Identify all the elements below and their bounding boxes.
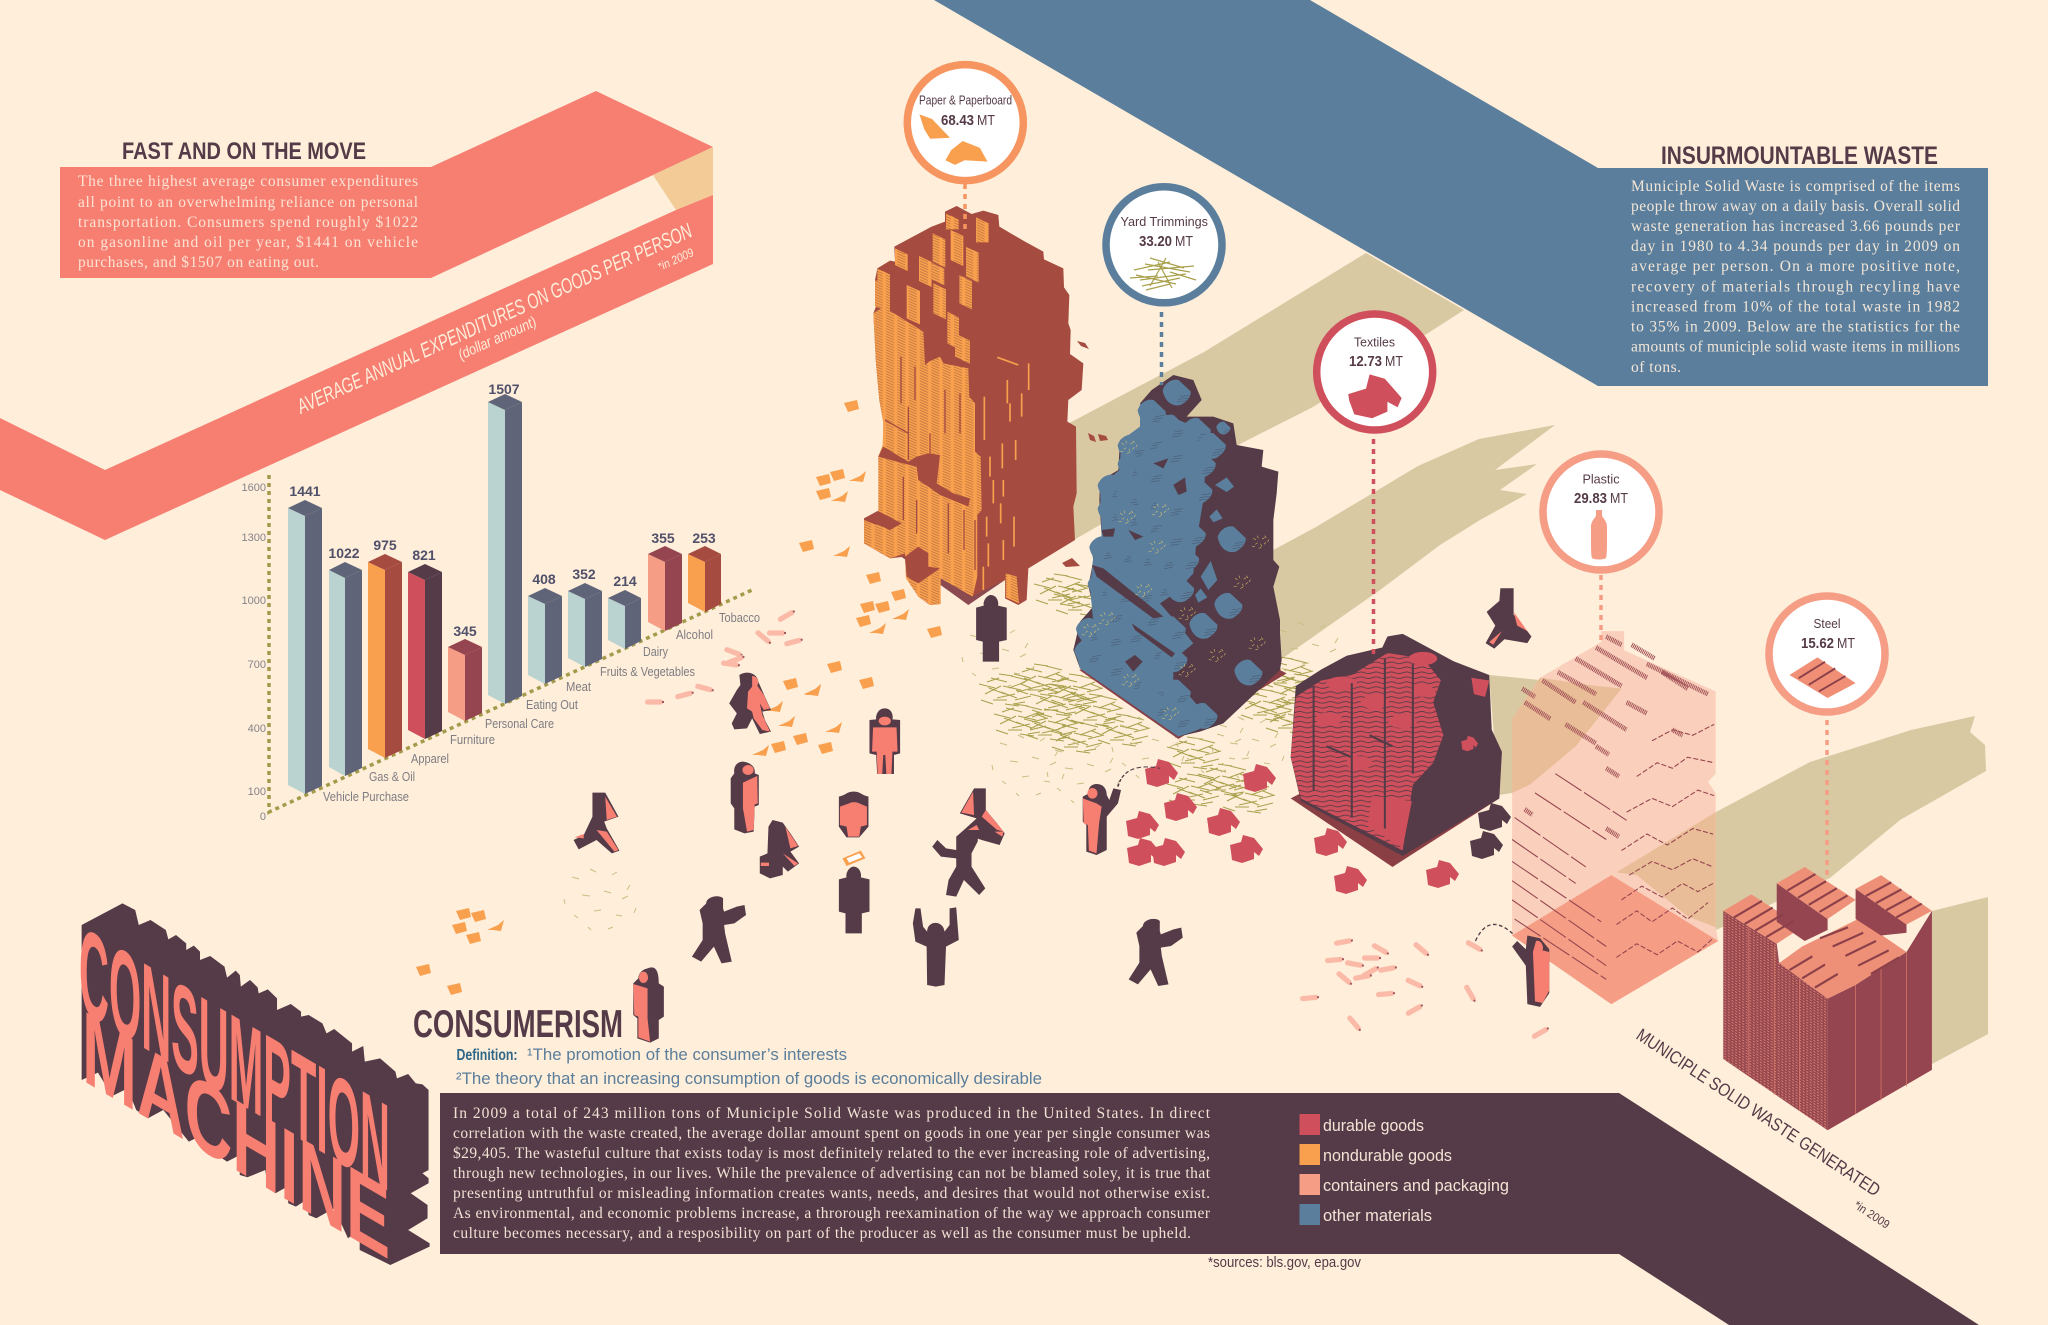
bar values: 345 xyxy=(453,623,477,639)
person: tumbling xyxy=(760,820,799,878)
text block: fast and on the move: purchases, and $1507 on eating out. xyxy=(78,254,319,271)
legend xyxy=(1300,1114,1509,1225)
icon: steel sheet xyxy=(1789,657,1856,698)
text block: fast and on the move: on gasonline and oil per year, $1441 on vehicle xyxy=(78,234,418,251)
bar values: 352 xyxy=(572,566,596,582)
y axis labels: 100 xyxy=(248,786,266,798)
textile highlights and gaps xyxy=(1316,652,1489,848)
bar values: 253 xyxy=(692,530,716,546)
person: seen from above xyxy=(839,792,868,837)
text block: insurmountable waste: people throw away on a daily basis. Overall solid xyxy=(1631,198,1960,215)
definition: Definition: xyxy=(456,1047,518,1064)
person: beside consumerism heading xyxy=(633,967,664,1043)
grass scatter around yard pile xyxy=(564,574,1344,930)
waste callouts xyxy=(907,65,1885,880)
text block: consumerism: through new technologies, in our lives. While the prevalence of advertising can not be blamed soley, it is true that xyxy=(453,1165,1211,1182)
pile silhouette xyxy=(1291,634,1502,856)
ribbon: consumerism panel xyxy=(440,1093,1979,1325)
callout: steel: MT xyxy=(1837,635,1855,652)
bar category labels: Meat xyxy=(566,680,591,694)
pile silhouette xyxy=(864,206,1083,605)
text block: insurmountable waste: Municiple Solid Waste is comprised of the items xyxy=(1631,178,1960,195)
callout: paper and paperboard: 68.43 xyxy=(941,112,974,129)
ribbon: fast and on the move / chart banner xyxy=(0,91,713,540)
callout: paper and paperboard: MT xyxy=(977,112,995,129)
person: side view with pink body xyxy=(731,762,759,833)
pile base xyxy=(1291,746,1499,867)
steel top plates xyxy=(1723,867,1932,999)
y axis labels: 0 xyxy=(260,811,266,823)
shadow seen through block xyxy=(1512,678,1716,927)
bar: alcohol xyxy=(648,546,682,631)
y axis labels: 1600 xyxy=(242,482,266,494)
heading: fast and on the move: FAST AND ON THE MOVE xyxy=(122,138,366,165)
bar: furniture xyxy=(408,564,442,739)
chart axes xyxy=(269,475,752,812)
text block: fast and on the move: all point to an overwhelming reliance on personal xyxy=(78,194,418,211)
brown shadow cuts on paper xyxy=(864,333,970,583)
ribbon: insurmountable waste panel xyxy=(934,0,1988,386)
text block: consumerism: culture becomes necessary, and a resposibility on part of the producer as well as the consumer must be upheld. xyxy=(453,1225,1191,1242)
bar category labels: Furniture xyxy=(450,733,495,747)
rotated label: municiple solid waste generated: MUNICIPLE SOLID WASTE GENERATED xyxy=(1633,1025,1884,1200)
pile: steel xyxy=(1723,867,1932,1130)
icon: bottle xyxy=(1591,510,1607,560)
bar values: 821 xyxy=(412,547,436,563)
bar category labels: Eating Out xyxy=(526,698,578,712)
icon: paper sheets xyxy=(919,114,988,165)
title: consumption machine xyxy=(79,900,430,1282)
callout: paper and paperboard xyxy=(907,65,1023,232)
text block: insurmountable waste: average per person. On a more positive note, xyxy=(1631,258,1960,275)
definition: ¹The promotion of the consumer’s interests xyxy=(527,1045,847,1064)
text block: fast and on the move xyxy=(78,173,418,271)
callout: yard trimmings xyxy=(1106,187,1222,385)
sources note: *sources: bls.gov, epa.gov xyxy=(1208,1255,1362,1271)
bar values: 975 xyxy=(373,537,397,553)
block right face xyxy=(1828,911,1932,1130)
text block: consumerism: $29,405. The wasteful culture that exists today is most definitely related to the ever increasing role of advertising, xyxy=(453,1145,1210,1162)
bar category labels xyxy=(323,611,760,804)
callout: plastic: Plastic xyxy=(1582,472,1620,486)
steel column lines xyxy=(1749,927,1906,1114)
bar: vehicle purchase xyxy=(288,500,322,794)
bar: tobacco xyxy=(688,546,721,612)
bar category labels: Dairy xyxy=(643,645,669,659)
callout: textiles: MT xyxy=(1385,353,1403,370)
title extrusion xyxy=(82,903,430,1265)
callout: steel: 15.62 xyxy=(1801,635,1834,652)
callout: yard trimmings: MT xyxy=(1175,233,1193,250)
translucent block xyxy=(1512,631,1718,1004)
text block: fast and on the move: The three highest average consumer expenditures xyxy=(78,173,418,190)
back sides of raised plates xyxy=(1777,883,1828,941)
bar values: 408 xyxy=(532,571,556,587)
dark gaps between bags xyxy=(1092,458,1187,672)
text block: insurmountable waste: of tons. xyxy=(1631,359,1681,376)
person: throwing shirt xyxy=(1083,784,1121,855)
legend: durable goods xyxy=(1323,1116,1424,1135)
bar category labels: Fruits & Vegetables xyxy=(600,665,695,679)
person: falling left xyxy=(574,793,619,853)
person: flying figure xyxy=(1486,588,1531,649)
throw arc xyxy=(1118,767,1160,787)
bottle rows on top xyxy=(1522,637,1708,837)
bar category labels: Personal Care xyxy=(485,717,554,731)
person: dancing dark figure xyxy=(932,830,985,897)
definition: ²The theory that an increasing consumption of goods is economically desirable xyxy=(456,1069,1042,1088)
callout: yard trimmings: Yard Trimmings xyxy=(1120,215,1208,229)
heading: insurmountable waste: INSURMOUNTABLE WASTE xyxy=(1661,142,1938,170)
person: running with paper xyxy=(729,673,771,734)
rotated label: municiple solid waste generated: *in 2009 xyxy=(1851,1198,1893,1232)
bar category labels: Tobacco xyxy=(719,611,760,625)
icon: grass xyxy=(1130,258,1196,290)
callout: plastic xyxy=(1543,454,1659,640)
scattered shirts xyxy=(1126,759,1511,894)
scattered bottles xyxy=(645,609,1550,1040)
person: walking dark right xyxy=(1129,919,1183,986)
pile: paper and paperboard xyxy=(864,206,1083,605)
text block: insurmountable waste: day in 1980 to 4.34 pounds per day in 2009 on xyxy=(1631,238,1960,255)
paper blocks at top xyxy=(875,213,1019,603)
text block: insurmountable waste: amounts of municiple solid waste items in millions xyxy=(1631,338,1960,356)
heading: consumerism: CONSUMERISM xyxy=(413,1003,623,1046)
person: standing under paper pile xyxy=(976,595,1007,662)
person: carried on shoulders xyxy=(960,788,1005,845)
person: throwing bottle xyxy=(1512,936,1549,1007)
callout: textiles xyxy=(1317,314,1433,658)
text block: consumerism: As environmental, and economic problems increase, a throrough reexamination of the way we approach consumer xyxy=(453,1205,1211,1222)
text block: insurmountable waste: recovery of materials through recyling have xyxy=(1631,278,1960,296)
legend: other materials xyxy=(1323,1206,1432,1225)
chart title on ribbon: (dollar amount) xyxy=(456,313,539,364)
bar: fruits and vegetables xyxy=(568,583,602,667)
bar: eating out xyxy=(488,394,522,704)
text block: consumerism xyxy=(453,1105,1211,1242)
callout: textiles: Textiles xyxy=(1354,336,1395,350)
bar category labels: Alcohol xyxy=(676,628,713,642)
paper front mass xyxy=(864,307,982,605)
pile: yard trimmings xyxy=(1073,375,1287,739)
y axis labels xyxy=(242,482,266,823)
bar values: 1441 xyxy=(289,483,321,499)
bar chart: average annual expenditures xyxy=(242,381,760,823)
bar values: 1022 xyxy=(328,545,360,561)
people crowd xyxy=(574,595,1183,1043)
text block: insurmountable waste: to 35% in 2009. Below are the statistics for the xyxy=(1631,318,1960,336)
cast shadows of the waste piles xyxy=(1060,253,1988,1064)
text block: consumerism: correlation with the waste created, the average dollar amount spent on goods in one year per single consumer was xyxy=(453,1125,1210,1142)
text block: consumerism: In 2009 a total of 243 million tons of Municiple Solid Waste was produced in the United States. In direct xyxy=(453,1105,1211,1122)
base xyxy=(1512,875,1718,1004)
text block: consumerism: presenting untruthful or misleading information creates wants, needs, and desires that would not otherwise exist. xyxy=(453,1185,1210,1202)
legend: nondurable goods xyxy=(1323,1146,1452,1165)
bar: apparel xyxy=(368,554,402,758)
paper slivers on shaded side xyxy=(983,357,1029,590)
bar values: 1507 xyxy=(488,381,520,397)
pile silhouette xyxy=(1073,375,1282,737)
pile base xyxy=(897,550,1005,605)
pile: textiles xyxy=(1291,634,1502,867)
bar values xyxy=(289,381,716,639)
flying box of goods xyxy=(842,851,865,866)
person: facing front with pink body xyxy=(869,708,900,774)
block left face xyxy=(1723,911,1828,1130)
callout: steel xyxy=(1769,596,1885,880)
blue mass xyxy=(1075,403,1213,737)
bar category labels: Gas & Oil xyxy=(369,770,415,784)
throw arc xyxy=(1475,924,1515,941)
text block: insurmountable waste: increased from 10% of the total waste in 1982 xyxy=(1631,298,1960,316)
text block: fast and on the move: transportation. Consumers spend roughly $1022 xyxy=(78,214,418,231)
text block: insurmountable waste: waste generation has increased 3.66 pounds per xyxy=(1631,218,1961,235)
scattered paper pieces xyxy=(416,341,1108,995)
y axis labels: 1300 xyxy=(242,532,266,544)
legend: containers and packaging xyxy=(1323,1176,1509,1195)
y axis labels: 700 xyxy=(248,659,266,671)
callout: yard trimmings: 33.20 xyxy=(1139,233,1172,250)
layer lines xyxy=(1512,724,1714,979)
callout: textiles: 12.73 xyxy=(1349,353,1382,370)
bar: meat xyxy=(528,588,562,684)
y axis labels: 1000 xyxy=(242,595,266,607)
callout: paper and paperboard: Paper & Paperboard xyxy=(919,94,1012,108)
person: arms raised xyxy=(913,907,959,987)
definition xyxy=(456,1045,1042,1088)
person: walking dark left xyxy=(692,896,746,963)
text block: insurmountable waste xyxy=(1631,178,1961,376)
bar: gas and oil xyxy=(329,562,362,776)
callout: plastic: 29.83 xyxy=(1574,490,1607,507)
y axis labels: 400 xyxy=(248,723,266,735)
person: standing dark xyxy=(839,867,869,933)
pile: plastic xyxy=(1512,631,1718,1004)
chart title on ribbon xyxy=(292,219,696,419)
bar: dairy xyxy=(608,590,641,649)
bags xyxy=(1074,380,1262,730)
chart title on ribbon: AVERAGE ANNUAL EXPENDITURES ON GOODS PER PERSON xyxy=(292,219,696,419)
bar category labels: Vehicle Purchase xyxy=(323,790,409,804)
chart title on ribbon: *in 2009 xyxy=(655,245,696,274)
people near plastic and textile piles xyxy=(1475,588,1549,1007)
textile front xyxy=(1291,653,1443,850)
bar values: 214 xyxy=(613,573,637,589)
yellow grass specks xyxy=(1082,441,1269,720)
callout: steel: Steel xyxy=(1814,617,1840,631)
icon: shirt xyxy=(1348,374,1402,418)
bar category labels: Apparel xyxy=(411,752,449,766)
bar values: 355 xyxy=(651,530,675,546)
pile base xyxy=(1079,627,1287,739)
bar: personal care xyxy=(448,639,482,721)
callout: plastic: MT xyxy=(1610,490,1628,507)
